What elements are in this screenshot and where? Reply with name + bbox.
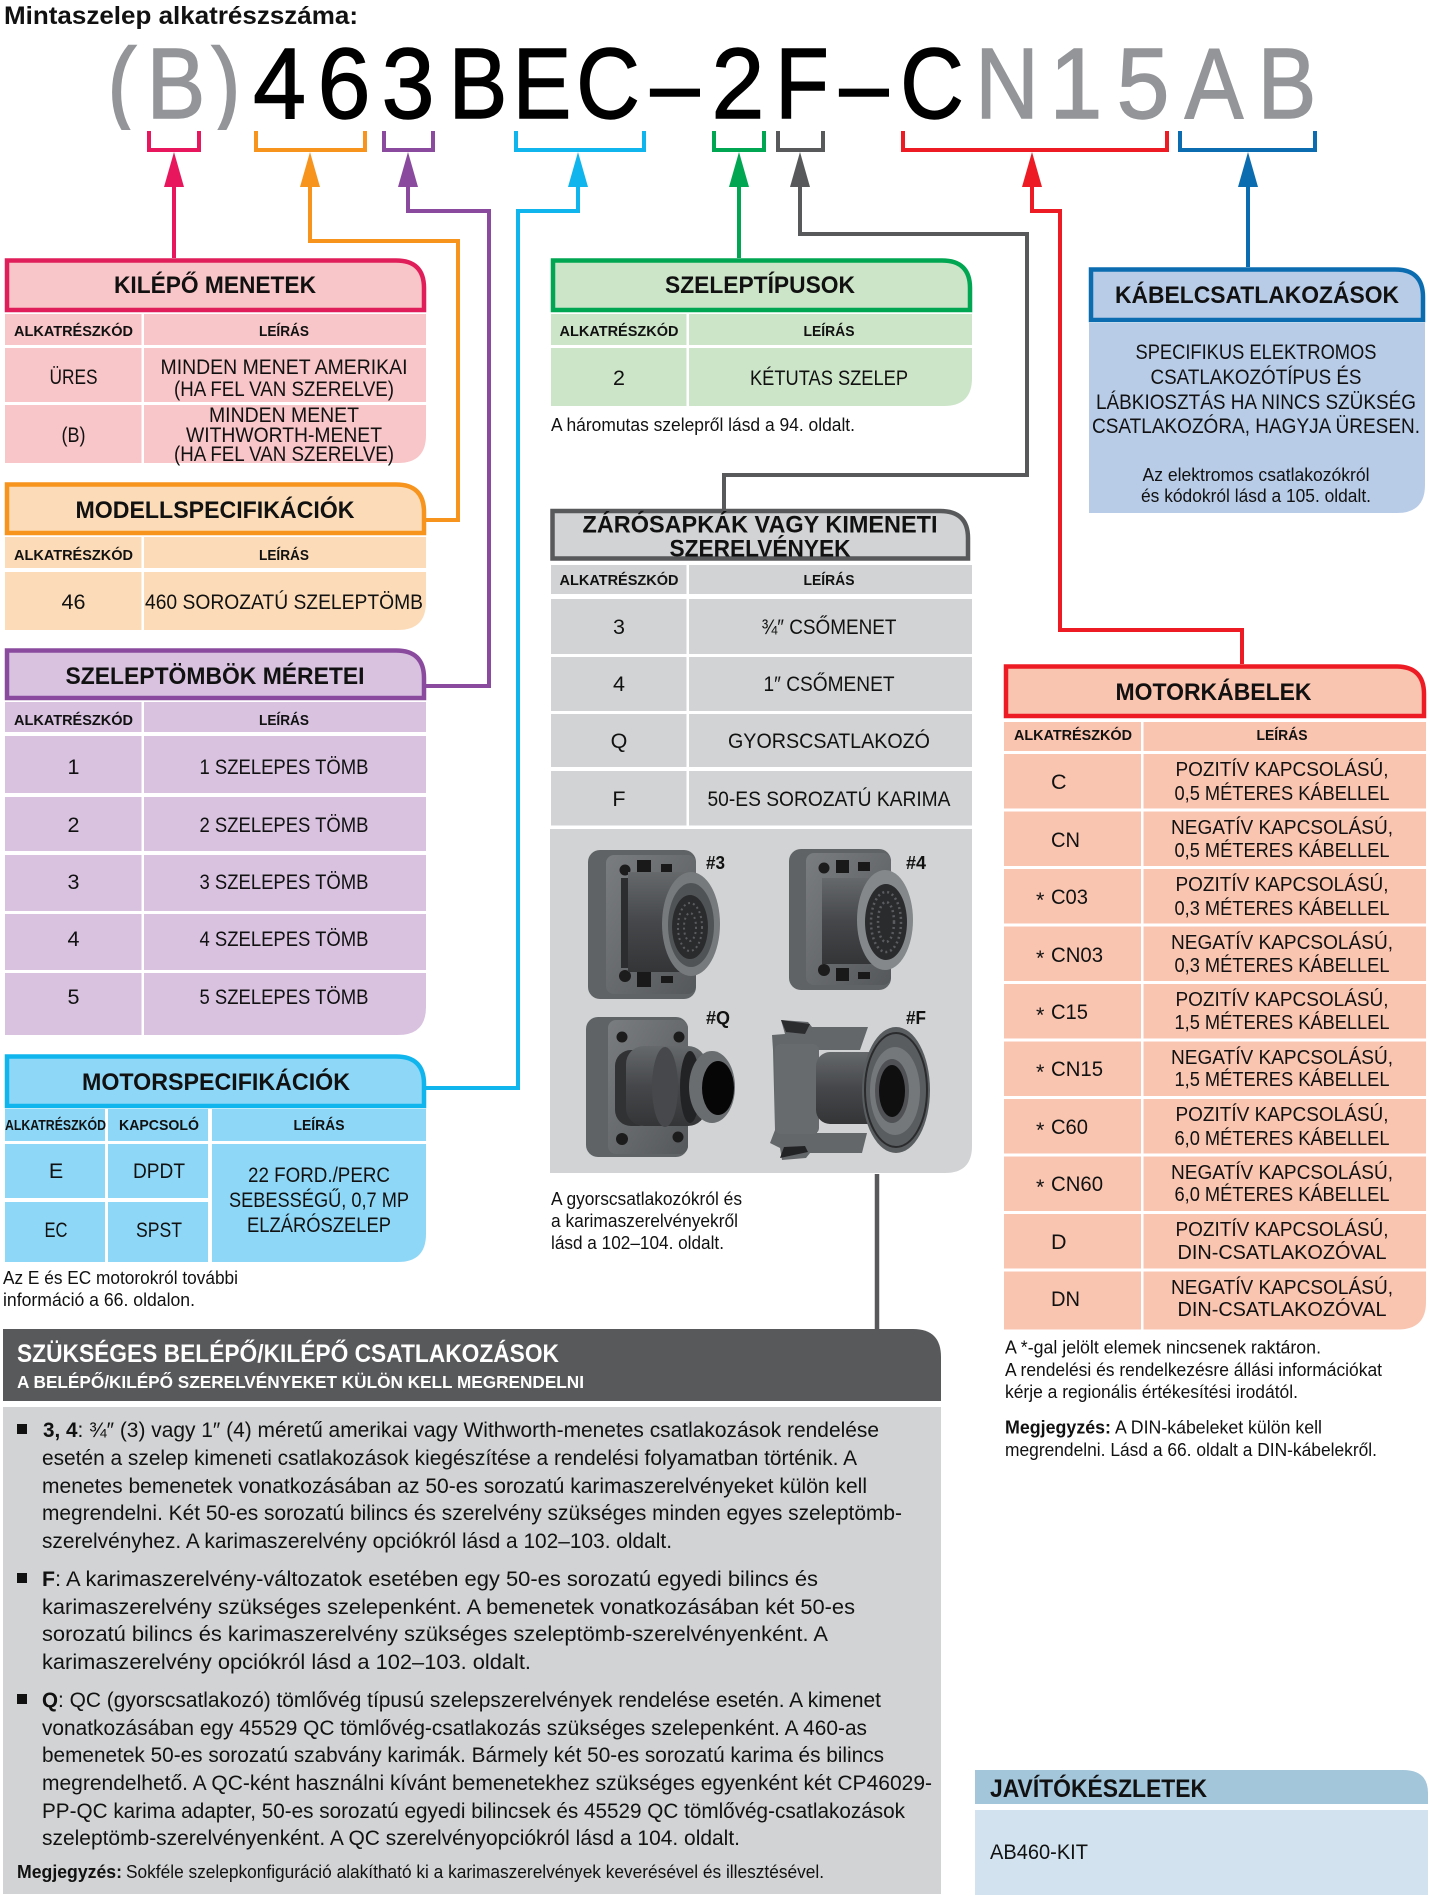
panel: repair kits	[975, 1770, 1428, 1895]
panel: outlet threads: LEÍRÁS	[259, 323, 309, 340]
panel: motor specifications: ELZÁRÓSZELEP	[247, 1212, 391, 1237]
panel: end caps and outlet fittings: 50-ES SOROZATÚ KARIMA	[708, 786, 951, 811]
panel: end caps and outlet fittings: 1″ CSŐMENET	[764, 671, 894, 696]
panel: valve block sizes: 1 SZELEPES TÖMB	[200, 755, 368, 779]
panel: motor cables: C	[1051, 770, 1067, 794]
panel: motor cables: 0,5 MÉTERES KÁBELLEL	[1174, 839, 1390, 862]
panel: required inlet/outlet connections: 3, 4	[43, 1418, 78, 1442]
panel: model specifications: ALKATRÉSZKÓD	[14, 546, 133, 564]
panel: motor cables: CN60	[1051, 1172, 1103, 1196]
note: quick couplers and flanges: a karimaszerelvényekről	[551, 1210, 738, 1231]
panel: motor cables: CN15	[1051, 1057, 1103, 1081]
part number code: 15	[1050, 28, 1169, 140]
panel: motor specifications: 22 FORD./PERC	[248, 1163, 390, 1187]
panel: valve types	[551, 260, 972, 406]
photo: fitting #4: #4	[906, 853, 926, 873]
panel: valve types: SZELEPTÍPUSOK	[665, 271, 856, 299]
panel: motor specifications: ALKATRÉSZKÓD	[5, 1116, 106, 1134]
panel: motor cables: MOTORKÁBELEK	[1116, 678, 1312, 706]
note: motors: információ a 66. oldalon.	[3, 1289, 195, 1310]
panel: end caps and outlet fittings: SZERELVÉNYEK	[670, 534, 851, 562]
panel: required inlet/outlet connections: A BELÉPŐ/KILÉPŐ SZERELVÉNYEKET KÜLÖN KELL MEGRENDELNI	[17, 1371, 584, 1392]
panel: cable connections: Az elektromos csatlakozókról	[1142, 464, 1370, 485]
panel: end caps and outlet fittings: GYORSCSATLAKOZÓ	[728, 728, 930, 753]
panel: motor cables: POZITÍV KAPCSOLÁSÚ,	[1176, 1218, 1388, 1241]
panel: required inlet/outlet connections: megrendelhető. A QC-ként használni kívánt bemenetekhez szükséges egyenként két CP46029-	[42, 1771, 932, 1795]
panel: motor cables: *	[1036, 1060, 1045, 1084]
panel: outlet threads: (HA FEL VAN SZERELVE)	[174, 442, 394, 466]
connector: motor specifications	[424, 131, 644, 1088]
panel: valve block sizes: 4 SZELEPES TÖMB	[200, 927, 368, 951]
panel: outlet threads	[5, 260, 426, 466]
panel: valve block sizes: 5	[68, 985, 80, 1009]
panel: motor cables: CN03	[1051, 943, 1103, 967]
note: motors: Az E és EC motorokról további	[3, 1267, 238, 1288]
panel: motor cables: POZITÍV KAPCSOLÁSÚ,	[1176, 988, 1388, 1011]
panel: valve block sizes: 5 SZELEPES TÖMB	[200, 985, 368, 1009]
panel: motor cables: NEGATÍV KAPCSOLÁSÚ,	[1171, 1276, 1393, 1299]
panel: outlet threads: KILÉPŐ MENETEK	[114, 271, 317, 299]
connector: end caps	[724, 131, 1027, 510]
photo: fitting #4	[789, 849, 926, 990]
panel: required inlet/outlet connections: Sokféle szelepkonfiguráció alakítható ki a karimaszerelvények keverésével és illesztésével.	[126, 1861, 824, 1882]
photo: fitting #3: #3	[706, 853, 725, 873]
note: stock and DIN cables: Megjegyzés:	[1005, 1416, 1111, 1438]
note: stock and DIN cables: A DIN-kábeleket külön kell	[1115, 1416, 1322, 1438]
panel: outlet threads: ÜRES	[50, 365, 98, 389]
panel: end caps and outlet fittings: LEÍRÁS	[804, 572, 854, 589]
connector: valve types	[714, 131, 764, 258]
panel: required inlet/outlet connections: F	[42, 1567, 55, 1591]
part number code: N	[975, 28, 1039, 139]
panel: motor specifications	[5, 1056, 426, 1262]
panel: cable connections: és kódokról lásd a 105. oldalt.	[1141, 485, 1371, 506]
panel: required inlet/outlet connections: : QC (gyorscsatlakozó) tömlővég típusú szelepszerelvények rendelése esetén. A kimenet	[58, 1688, 881, 1712]
part number code: AB	[1185, 28, 1316, 139]
panel: model specifications: 46	[62, 590, 86, 614]
panel: outlet threads: MINDEN MENET	[209, 403, 359, 427]
panel: valve block sizes: LEÍRÁS	[259, 712, 309, 729]
panel: end caps and outlet fittings: F	[612, 787, 626, 811]
panel: motor cables: C60	[1051, 1115, 1088, 1139]
note: quick couplers and flanges: A gyorscsatlakozókról és	[551, 1188, 742, 1209]
panel: required inlet/outlet connections: szerelvényhez. A karimaszerelvény opciókról lásd a 102–103. oldalt.	[42, 1529, 672, 1553]
panel: end caps and outlet fittings	[550, 510, 972, 1173]
panel: valve block sizes: 2 SZELEPES TÖMB	[200, 813, 368, 837]
panel: valve block sizes: 3 SZELEPES TÖMB	[200, 870, 368, 894]
panel: motor specifications: DPDT	[133, 1159, 185, 1183]
panel: required inlet/outlet connections: sorozatú bilincs és karimaszerelvény szükséges szeleptömb-szerelvényenként. A	[42, 1622, 829, 1646]
part number code: F–C	[775, 28, 964, 139]
panel: required inlet/outlet connections	[3, 1329, 941, 1894]
part number code: (B)	[107, 28, 241, 139]
panel: cable connections: CSATLAKOZÓTÍPUS ÉS	[1150, 364, 1362, 389]
panel: required inlet/outlet connections: SZÜKSÉGES BELÉPŐ/KILÉPŐ CSATLAKOZÁSOK	[17, 1339, 559, 1368]
panel: motor cables: NEGATÍV KAPCSOLÁSÚ,	[1171, 1161, 1393, 1184]
panel: motor specifications: EC	[44, 1218, 68, 1242]
panel: end caps and outlet fittings: 3	[613, 615, 625, 639]
panel: required inlet/outlet connections: : ¾″ (3) vagy 1″ (4) méretű amerikai vagy Withworth-menetes csatlakozások rendelése	[78, 1418, 879, 1442]
panel: motor cables: POZITÍV KAPCSOLÁSÚ,	[1176, 873, 1388, 896]
panel: valve types: KÉTUTAS SZELEP	[750, 365, 908, 390]
panel: valve block sizes	[5, 650, 426, 1035]
panel: motor cables: DN	[1051, 1287, 1080, 1311]
panel: required inlet/outlet connections: szeleptömb-szerelvényenként. A QC szerelvényopciókról lásd a 104. oldalt.	[42, 1826, 740, 1850]
panel: required inlet/outlet connections: megrendelni. Két 50-es sorozatú bilincs és szerelvény szükséges minden egyes szeleptömb-	[42, 1501, 902, 1525]
panel: motor cables: 0,3 MÉTERES KÁBELLEL	[1174, 897, 1390, 920]
panel: motor cables	[1004, 666, 1426, 1330]
panel: required inlet/outlet connections: bemenetek 50-es sorozatú szabvány karimák. Bármely két 50-es sorozatú karima és bilincs	[42, 1743, 884, 1767]
panel: valve block sizes: 4	[68, 927, 80, 951]
panel: end caps and outlet fittings: 4	[613, 672, 625, 696]
panel: motor cables: C03	[1051, 885, 1088, 909]
title: Mintaszelep alkatrészszáma:	[4, 2, 358, 30]
panel: model specifications	[5, 484, 426, 630]
panel: motor cables: 6,0 MÉTERES KÁBELLEL	[1174, 1183, 1390, 1206]
note: quick couplers and flanges: lásd a 102–104. oldalt.	[551, 1232, 724, 1253]
panel: motor cables: *	[1036, 888, 1045, 912]
photo: fitting #Q: #Q	[706, 1008, 730, 1028]
panel: motor specifications: KAPCSOLÓ	[119, 1116, 199, 1134]
panel: cable connections	[1089, 270, 1425, 513]
panel: motor cables: 0,3 MÉTERES KÁBELLEL	[1174, 954, 1390, 977]
photo: fitting #3	[588, 850, 725, 999]
panel: required inlet/outlet connections: Megjegyzés:	[17, 1861, 122, 1882]
panel: repair kits: JAVÍTÓKÉSZLETEK	[990, 1773, 1207, 1803]
panel: motor cables: 6,0 MÉTERES KÁBELLEL	[1174, 1127, 1390, 1150]
panel: motor specifications: LEÍRÁS	[294, 1117, 344, 1134]
panel: motor cables: *	[1036, 1003, 1045, 1027]
panel: motor cables: NEGATÍV KAPCSOLÁSÚ,	[1171, 1046, 1393, 1069]
connector: model specifications	[256, 131, 458, 520]
panel: motor cables: ALKATRÉSZKÓD	[1014, 726, 1132, 744]
panel: valve types: 2	[613, 366, 625, 390]
panel: motor specifications: MOTORSPECIFIKÁCIÓK	[82, 1068, 351, 1096]
note: stock and DIN cables: A *-gal jelölt elemek nincsenek raktáron.	[1005, 1336, 1321, 1358]
panel: motor cables: *	[1036, 1175, 1045, 1199]
panel: required inlet/outlet connections: : A karimaszerelvény-változatok esetében egy 50-es sorozatú egyedi bilincs és	[55, 1567, 818, 1591]
note: quick couplers and flanges	[551, 1188, 742, 1253]
note: stock and DIN cables	[1005, 1336, 1382, 1460]
panel: motor cables: *	[1036, 1118, 1045, 1142]
panel: cable connections: KÁBELCSATLAKOZÁSOK	[1115, 281, 1400, 309]
panel: model specifications: MODELLSPECIFIKÁCIÓK	[76, 496, 355, 524]
panel: end caps and outlet fittings: ¾″ CSŐMENET	[762, 614, 896, 639]
panel: end caps and outlet fittings: ZÁRÓSAPKÁK VAGY KIMENETI	[582, 510, 938, 538]
panel: outlet threads: ALKATRÉSZKÓD	[14, 322, 133, 340]
connector: cable connections	[1180, 131, 1315, 267]
panel: outlet threads: WITHWORTH-MENET	[186, 423, 382, 447]
note: three-way valve: A háromutas szelepről lásd a 94. oldalt.	[551, 414, 855, 435]
note: motors	[3, 1267, 238, 1310]
connector: motor cables	[903, 131, 1242, 664]
panel: required inlet/outlet connections: menetes bemenetek vonatkozásában az 50-es sorozatú karimaszerelvényeket külön kell	[42, 1474, 867, 1498]
panel: repair kits: AB460-KIT	[990, 1840, 1088, 1864]
connector: required connections	[875, 1174, 879, 1329]
panel: valve block sizes: 1	[68, 755, 79, 779]
panel: required inlet/outlet connections: karimaszerelvény opciókról lásd a 102–103. oldalt.	[42, 1650, 531, 1674]
panel: motor cables: C15	[1051, 1000, 1088, 1024]
panel: required inlet/outlet connections: karimaszerelvény szükséges szelepenként. A bemenetek vonatkozásában két 50-es	[42, 1595, 855, 1619]
part number code	[107, 28, 1316, 140]
panel: motor specifications: E	[49, 1159, 63, 1183]
note: stock and DIN cables: megrendelni. Lásd a 66. oldalt a DIN-kábelekről.	[1005, 1439, 1377, 1460]
panel: required inlet/outlet connections: vonatkozásában egy 45529 QC tömlővég-csatlakozás szükséges szelepenként. A 460-as	[42, 1716, 867, 1740]
panel: valve types: ALKATRÉSZKÓD	[560, 322, 679, 340]
panel: outlet threads: (B)	[62, 423, 86, 447]
part number code: 463	[253, 28, 434, 140]
photo: fitting #Q	[586, 1008, 735, 1157]
panel: motor cables: POZITÍV KAPCSOLÁSÚ,	[1176, 758, 1388, 781]
panel: outlet threads: (HA FEL VAN SZERELVE)	[174, 377, 394, 401]
panel: end caps and outlet fittings: Q	[611, 729, 627, 753]
panel: outlet threads: MINDEN MENET AMERIKAI	[160, 355, 408, 379]
panel: motor cables: CN	[1051, 828, 1080, 852]
panel: motor cables: LEÍRÁS	[1256, 727, 1308, 744]
panel: motor cables: 0,5 MÉTERES KÁBELLEL	[1174, 782, 1390, 805]
note: stock and DIN cables: kérje a regionális értékesítési irodától.	[1005, 1381, 1298, 1402]
panel: motor cables: NEGATÍV KAPCSOLÁSÚ,	[1171, 816, 1393, 839]
panel: motor cables: D	[1051, 1230, 1067, 1254]
panel: valve block sizes: SZELEPTÖMBÖK MÉRETEI	[66, 662, 364, 690]
panel: valve block sizes: ALKATRÉSZKÓD	[14, 711, 133, 729]
part number code: BEC–	[449, 28, 700, 139]
connector: valve block sizes	[384, 131, 489, 686]
part number code: 2	[712, 28, 764, 140]
panel: valve block sizes: 3	[68, 870, 80, 894]
photo: fitting #F: #F	[906, 1008, 926, 1028]
panel: motor cables: 1,5 MÉTERES KÁBELLEL	[1174, 1068, 1390, 1091]
note: stock and DIN cables: A rendelési és rendelkezésre állási információkat	[1005, 1359, 1382, 1380]
panel: cable connections: SPECIFIKUS ELEKTROMOS	[1136, 340, 1376, 364]
panel: model specifications: LEÍRÁS	[259, 547, 309, 564]
panel: motor cables: DIN-CSATLAKOZÓVAL	[1178, 1241, 1386, 1264]
panel: valve types: LEÍRÁS	[804, 323, 854, 340]
panel: required inlet/outlet connections: esetén a szelep kimeneti csatlakozások kiegészítése a rendelési folyamatban történik. A	[42, 1446, 858, 1470]
panel: motor specifications: SPST	[136, 1218, 182, 1242]
panel: motor cables: POZITÍV KAPCSOLÁSÚ,	[1176, 1103, 1388, 1126]
panel: motor cables: *	[1036, 946, 1045, 970]
panel: motor cables: 1,5 MÉTERES KÁBELLEL	[1174, 1011, 1390, 1034]
panel: valve block sizes: 2	[68, 813, 79, 837]
panel: motor cables: NEGATÍV KAPCSOLÁSÚ,	[1171, 931, 1393, 954]
panel: model specifications: 460 SOROZATÚ SZELEPTÖMB	[145, 589, 423, 614]
connector: outlet threads	[149, 131, 199, 258]
photo: fitting #F	[770, 1008, 930, 1160]
panel: motor cables: DIN-CSATLAKOZÓVAL	[1178, 1298, 1386, 1321]
panel: motor specifications: SEBESSÉGŰ, 0,7 MP	[229, 1187, 409, 1212]
panel: end caps and outlet fittings: ALKATRÉSZKÓD	[560, 571, 679, 589]
panel: required inlet/outlet connections: Q	[42, 1688, 58, 1712]
panel: required inlet/outlet connections: PP-QC karima adapter, 50-es sorozatú egyedi bilincsek és 45529 QC tömlővég-csatlakozások	[42, 1799, 905, 1823]
